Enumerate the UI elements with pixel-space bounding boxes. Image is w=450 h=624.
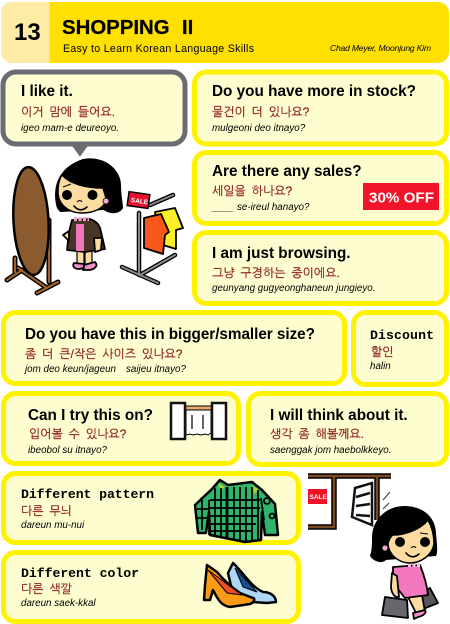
illustration: clothes rack — [122, 192, 183, 283]
panel: just browsing: geunyang gugyeonghaneun jungieyo. — [212, 283, 375, 294]
title: SHOPPING — [62, 17, 170, 39]
icon: blue shoe — [228, 563, 276, 603]
dress — [393, 565, 428, 598]
panel: different pattern: dareun mu-nui — [21, 520, 85, 531]
hair back — [55, 158, 123, 213]
illustration: woman with shopping bags — [370, 506, 438, 619]
panel: any sales: ____ — [211, 202, 234, 213]
icon: orange shoe — [204, 565, 254, 607]
illustration: standing mirror — [7, 166, 58, 293]
panel: any sales — [194, 152, 446, 224]
motion lines — [383, 492, 390, 509]
panel: discount: Discount — [370, 328, 434, 343]
panel: think about it: I will think about it. — [270, 407, 408, 424]
lesson number: 13 — [14, 19, 41, 46]
panel: think about it: 생각 좀 해볼께요. — [270, 427, 364, 441]
panel: different pattern — [4, 474, 298, 542]
subtitle: Easy to Learn Korean Language Skills — [63, 43, 254, 55]
panel: bigger smaller size: jom deo keun/jageun — [23, 364, 116, 375]
panel: different color: Different color — [21, 566, 139, 581]
far bag — [420, 588, 438, 609]
illustration: woman at mirror — [55, 158, 123, 270]
30% off badge: 30% OFF — [369, 190, 434, 206]
sale sign: SALE — [130, 197, 149, 206]
panel: any sales: 세일을 하나요? — [212, 184, 293, 198]
panel: bigger smaller size: 좀 더 큰/작은 사이즈 있나요? — [25, 347, 183, 361]
icon: plaid jacket — [195, 480, 278, 542]
near bag — [382, 597, 408, 618]
authors: Chad Meyer, Moonjung Kim — [330, 43, 431, 53]
panel: just browsing — [194, 232, 446, 304]
title: II — [182, 17, 193, 39]
panel: I like it speech bubble: 이거 맘에 들어요. — [21, 105, 115, 119]
panel: I like it speech bubble: igeo mam-e deureoyo. — [21, 123, 119, 134]
face — [58, 175, 106, 213]
legs and shoe — [408, 595, 425, 613]
panel: more in stock: Do you have more in stock? — [212, 83, 416, 100]
icon: fitting room — [171, 403, 226, 439]
30% off badge — [363, 183, 439, 210]
panel: different pattern: 다른 무늬 — [21, 504, 72, 518]
panel: more in stock: 물건이 더 있나요? — [212, 105, 310, 119]
panel: think about it: saenggak jom haebolkkeyo. — [270, 445, 391, 456]
hair — [370, 506, 437, 562]
panel: bigger smaller size: Do you have this in bigger/smaller size? — [25, 326, 315, 343]
panel: just browsing: I am just browsing. — [212, 245, 351, 262]
panel: any sales: Are there any sales? — [212, 163, 362, 180]
panel: different color: 다른 색깔 — [21, 582, 72, 596]
panel: different color: dareun saek-kkal — [21, 598, 96, 609]
panel: more in stock: mulgeoni deo itnayo? — [212, 123, 306, 134]
panel: discount: 할인 — [371, 345, 394, 359]
panel: try this on: 입어볼 수 있나요? — [29, 427, 127, 441]
sale sign: SALE — [310, 494, 328, 501]
panel: I like it speech bubble: I like it. — [21, 83, 73, 100]
panel: different color — [4, 552, 298, 622]
panel: I like it speech bubble — [3, 72, 185, 155]
necklace — [74, 217, 89, 221]
orange shirt — [144, 214, 169, 254]
panel: discount — [354, 312, 446, 384]
panel: just browsing: 그냥 구경하는 중이에요. — [212, 266, 340, 280]
illustration: shop door — [308, 476, 391, 527]
door — [352, 483, 372, 525]
panel: try this on: ibeobol su itnayo? — [28, 445, 108, 456]
panel: discount: halin — [370, 361, 391, 372]
panel: think about it — [248, 394, 446, 464]
face — [388, 520, 434, 563]
jacket — [67, 219, 105, 252]
panel: bigger smaller size — [4, 312, 344, 384]
panel: different pattern: Different pattern — [21, 487, 154, 502]
panel: bigger smaller size: saijeu itnayo? — [126, 364, 186, 375]
panel: more in stock — [194, 72, 446, 144]
legs and shoes — [77, 250, 84, 264]
panel: try this on — [4, 394, 238, 464]
panel: try this on: Can I try this on? — [28, 407, 153, 424]
panel: any sales: se-ireul hanayo? — [237, 202, 310, 213]
header banner — [1, 2, 449, 63]
yellow shirt — [155, 208, 183, 249]
